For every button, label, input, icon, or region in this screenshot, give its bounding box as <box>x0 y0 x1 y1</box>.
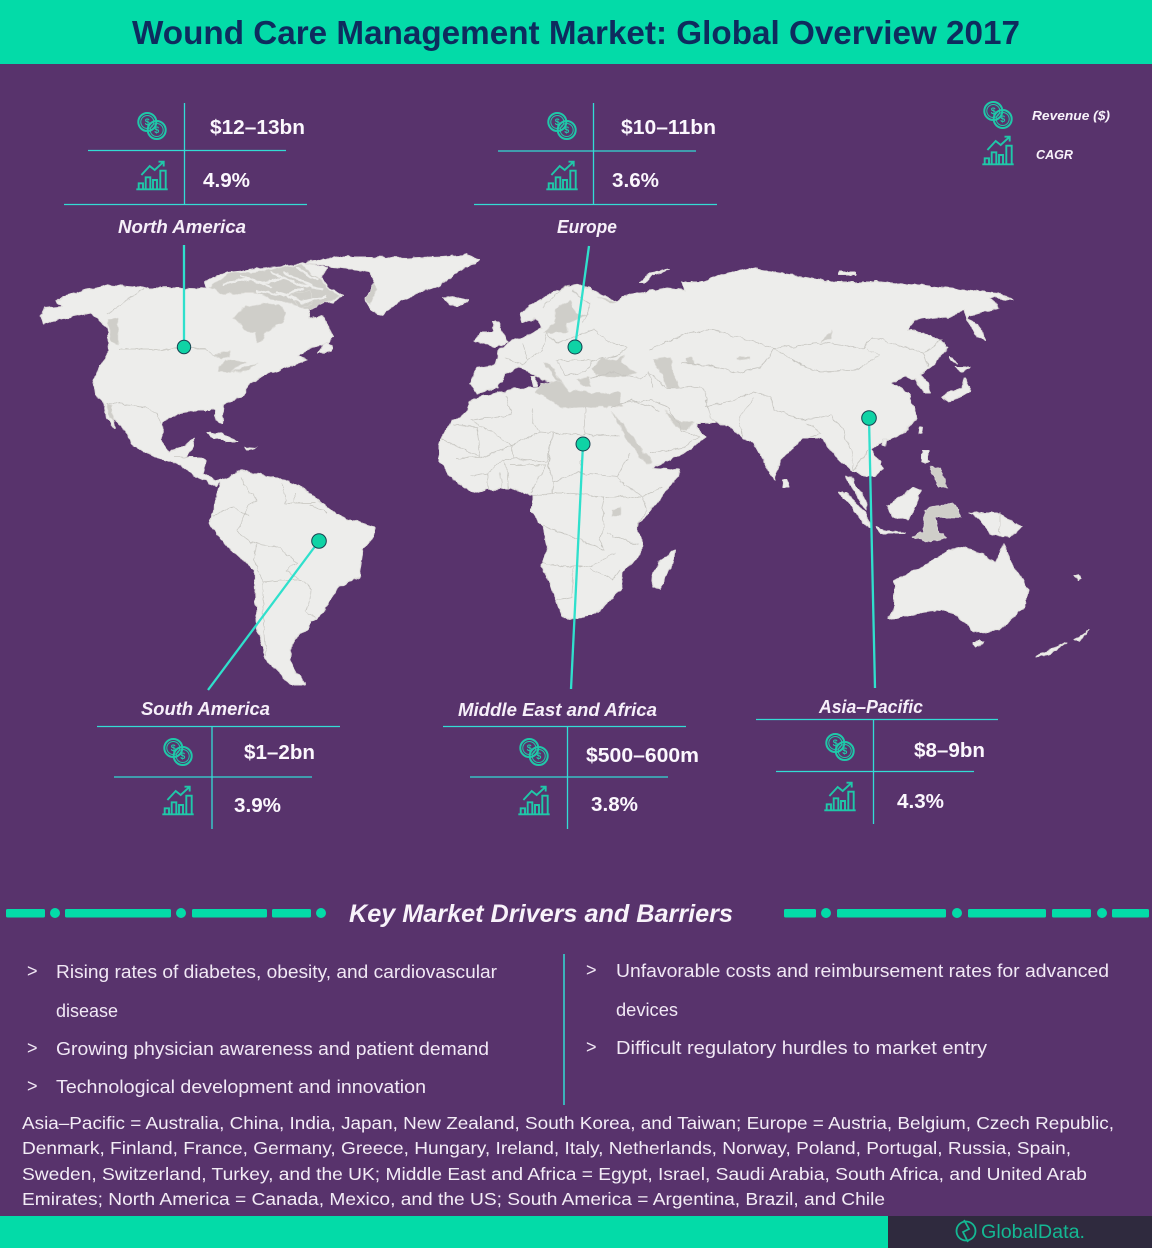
panel: Middle East and Africa stats: $500–600m <box>586 745 699 767</box>
map: Afro-Eurasia <box>440 268 1012 619</box>
icon: revenue coins: $ <box>171 743 176 753</box>
map: country borders <box>106 285 1000 657</box>
icon: CAGR chart <box>824 783 856 810</box>
legend: Revenue ($) <box>1032 108 1110 123</box>
panel: Asia-Pacific stats: $8–9bn <box>914 740 985 762</box>
world map <box>40 255 1090 685</box>
icon: legend CAGR chart <box>982 137 1014 164</box>
panel: Middle East and Africa stats: Middle East and Africa <box>458 699 657 720</box>
icon: CAGR chart <box>518 787 550 814</box>
icon: revenue coins <box>138 113 166 139</box>
icon: revenue coins: $ <box>564 125 569 135</box>
text block: market barriers: > <box>586 960 597 980</box>
section heading: Key Market Drivers and Barriers: Key Market Drivers and Barriers <box>349 900 733 928</box>
divider between drivers and barriers <box>563 954 565 1105</box>
text block: market drivers: > <box>27 961 38 981</box>
connector and marker: Asia-Pacific <box>862 411 876 688</box>
text block: market drivers: > <box>27 1038 38 1058</box>
footnote: region definitions: Denmark, Finland, France, Germany, Greece, Hungary, Ireland, Italy, Netherlands, Norway, Poland, Portugal, Russia, Spain, <box>22 1138 1071 1158</box>
text block: market drivers <box>27 961 497 1097</box>
icon: revenue coins <box>548 113 576 139</box>
panel: North America stats: $12–13bn <box>210 117 305 139</box>
text block: market drivers: Growing physician awareness and patient demand <box>56 1039 489 1059</box>
icon: revenue coins: $ <box>180 751 185 761</box>
panel: Europe stats: Europe <box>557 216 617 237</box>
panel: Middle East and Africa stats: 3.8% <box>591 794 638 816</box>
panel: Asia-Pacific stats: 4.3% <box>897 791 944 813</box>
legend: CAGR <box>1036 147 1074 162</box>
map: Greenland <box>303 255 480 315</box>
map: Canadian arctic islands <box>222 268 326 302</box>
icon: revenue coins: $ <box>536 751 541 761</box>
text block: market barriers: devices <box>616 1000 678 1020</box>
legend <box>982 102 1110 164</box>
connector and marker: South America <box>208 534 326 690</box>
text block: market drivers: disease <box>56 1001 118 1021</box>
connector and marker: Europe <box>568 246 589 354</box>
text block: market barriers: > <box>586 1037 597 1057</box>
footnote: region definitions: Asia–Pacific = Australia, China, India, Japan, New Zealand, South Korea, and Taiwan; Europe = Austria, Belgium, Czech Republic, <box>22 1113 1114 1133</box>
text block: market barriers: Difficult regulatory hurdles to market entry <box>616 1038 987 1058</box>
icon: revenue coins: $ <box>145 117 150 127</box>
connector and marker: Middle East and Africa <box>571 437 590 689</box>
icon: CAGR chart <box>162 787 194 814</box>
text block: market barriers: Unfavorable costs and reimbursement rates for advanced <box>616 961 1109 981</box>
icon: revenue coins <box>164 739 192 765</box>
text block: market drivers: Technological development and innovation <box>56 1077 426 1097</box>
icon: revenue coins: $ <box>154 125 159 135</box>
icon: legend revenue coins <box>984 102 1012 128</box>
text block: market drivers: > <box>27 1076 38 1096</box>
logo: GlobalData: GlobalData. <box>981 1222 1085 1243</box>
map: Americas <box>40 263 374 685</box>
icon: revenue coins <box>520 739 548 765</box>
panel: Europe stats <box>474 103 717 237</box>
connector and marker: North America <box>177 245 191 354</box>
section heading: Key Market Drivers and Barriers <box>6 900 1149 928</box>
footnote: region definitions <box>22 1113 1114 1209</box>
title banner: Wound Care Management Market: Global Overview 2017 <box>132 14 1020 51</box>
panel: Asia-Pacific stats: Asia–Pacific <box>818 696 924 717</box>
footer bar <box>0 1216 1152 1248</box>
panel: Europe stats: $10–11bn <box>621 117 716 139</box>
panel: North America stats <box>64 103 307 237</box>
icon: revenue coins: $ <box>527 743 532 753</box>
icon: revenue coins: $ <box>833 738 838 748</box>
icon: revenue coins <box>826 734 854 760</box>
panel: South America stats: $1–2bn <box>244 742 315 764</box>
icon: CAGR chart <box>136 162 168 189</box>
panel: North America stats: 4.9% <box>203 170 250 192</box>
text block: market barriers <box>586 960 1109 1058</box>
title banner <box>0 0 1152 64</box>
icon: legend revenue coins: $ <box>991 106 996 116</box>
icon: legend revenue coins: $ <box>1000 114 1005 124</box>
text block: market drivers: Rising rates of diabetes, obesity, and cardiovascular <box>56 962 497 982</box>
panel: Europe stats: 3.6% <box>612 170 659 192</box>
icon: revenue coins: $ <box>842 746 847 756</box>
footnote: region definitions: Emirates; North America = Canada, Mexico, and the US; South America = Argentina, Brazil, and Chile <box>22 1189 885 1209</box>
panel: South America stats <box>97 698 340 829</box>
icon: revenue coins: $ <box>555 117 560 127</box>
panel: South America stats: 3.9% <box>234 795 281 817</box>
panel: Asia-Pacific stats <box>756 696 998 824</box>
panel: South America stats: South America <box>141 698 270 719</box>
footnote: region definitions: Sweden, Switzerland, Turkey, and the UK; Middle East and Africa = Egypt, Israel, Saudi Arabia, South Africa, and United Arab <box>22 1164 1087 1184</box>
panel: North America stats: North America <box>118 216 246 237</box>
panel: Middle East and Africa stats <box>443 699 699 829</box>
map: islands <box>207 270 1090 657</box>
map: seas and lakes <box>106 265 962 542</box>
icon: CAGR chart <box>546 162 578 189</box>
